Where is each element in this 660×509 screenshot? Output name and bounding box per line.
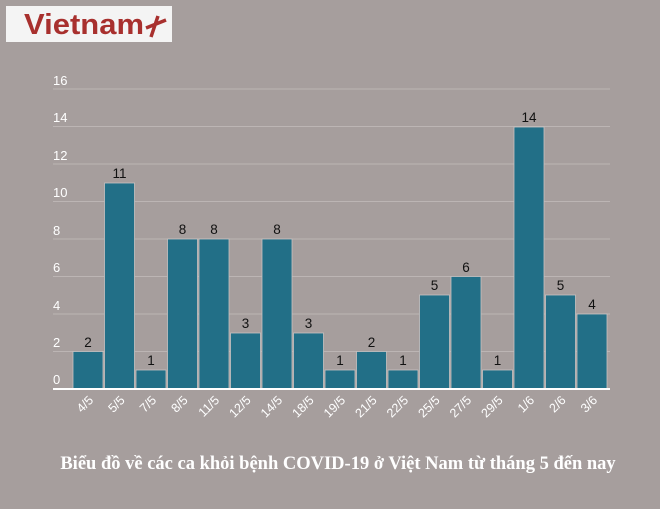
y axis labels: 10 bbox=[53, 185, 67, 200]
logo: Vietnam bbox=[24, 9, 144, 41]
x axis labels: 8/5 bbox=[168, 393, 191, 415]
x axis labels: 7/5 bbox=[137, 393, 159, 415]
x axis labels: 11/5 bbox=[196, 393, 222, 420]
value labels: 1 bbox=[399, 353, 407, 368]
value labels: 6 bbox=[462, 260, 470, 275]
x axis labels: 12/5 bbox=[227, 393, 254, 420]
y axis labels: 8 bbox=[53, 223, 60, 238]
y axis labels: 14 bbox=[53, 110, 67, 125]
x axis labels: 14/5 bbox=[258, 393, 285, 420]
x axis labels: 1/6 bbox=[515, 393, 537, 415]
y axis labels bbox=[53, 73, 67, 387]
y axis labels: 16 bbox=[53, 73, 67, 88]
x axis labels: 5/5 bbox=[105, 393, 128, 415]
x axis labels: 18/5 bbox=[290, 393, 317, 420]
value labels: 8 bbox=[273, 222, 281, 237]
value labels: 2 bbox=[368, 335, 375, 350]
value labels: 8 bbox=[179, 222, 186, 237]
x axis labels bbox=[74, 393, 600, 420]
x axis labels: 2/6 bbox=[546, 393, 569, 415]
value labels: 11 bbox=[112, 166, 127, 181]
caption: Biểu đồ về các ca khỏi bệnh COVID-19 ở Việt Nam từ tháng 5 đến nay bbox=[60, 454, 616, 474]
value labels: 8 bbox=[210, 222, 218, 237]
x axis labels: 19/5 bbox=[321, 393, 348, 420]
y axis labels: 6 bbox=[53, 260, 60, 275]
x axis labels: 29/5 bbox=[479, 393, 506, 420]
x axis labels: 21/5 bbox=[353, 393, 380, 420]
x axis labels: 3/6 bbox=[578, 393, 600, 415]
value labels: 4 bbox=[588, 297, 596, 312]
y axis labels: 0 bbox=[53, 372, 60, 387]
x axis labels: 25/5 bbox=[416, 393, 443, 420]
value labels: 5 bbox=[431, 278, 438, 293]
value labels: 1 bbox=[336, 353, 344, 368]
x axis labels: 22/5 bbox=[384, 393, 411, 420]
value labels: 1 bbox=[494, 353, 501, 368]
y axis labels: 2 bbox=[53, 335, 60, 350]
value labels: 1 bbox=[147, 353, 155, 368]
bars bbox=[73, 127, 607, 389]
value labels: 3 bbox=[242, 316, 249, 331]
logo bbox=[6, 6, 172, 42]
x axis labels: 27/5 bbox=[447, 393, 474, 420]
value labels bbox=[84, 110, 596, 368]
value labels: 14 bbox=[521, 110, 537, 125]
x axis labels: 4/5 bbox=[74, 393, 96, 415]
y axis labels: 4 bbox=[53, 298, 60, 313]
value labels: 3 bbox=[305, 316, 312, 331]
y axis labels: 12 bbox=[53, 148, 67, 163]
value labels: 5 bbox=[557, 278, 564, 293]
value labels: 2 bbox=[84, 335, 92, 350]
